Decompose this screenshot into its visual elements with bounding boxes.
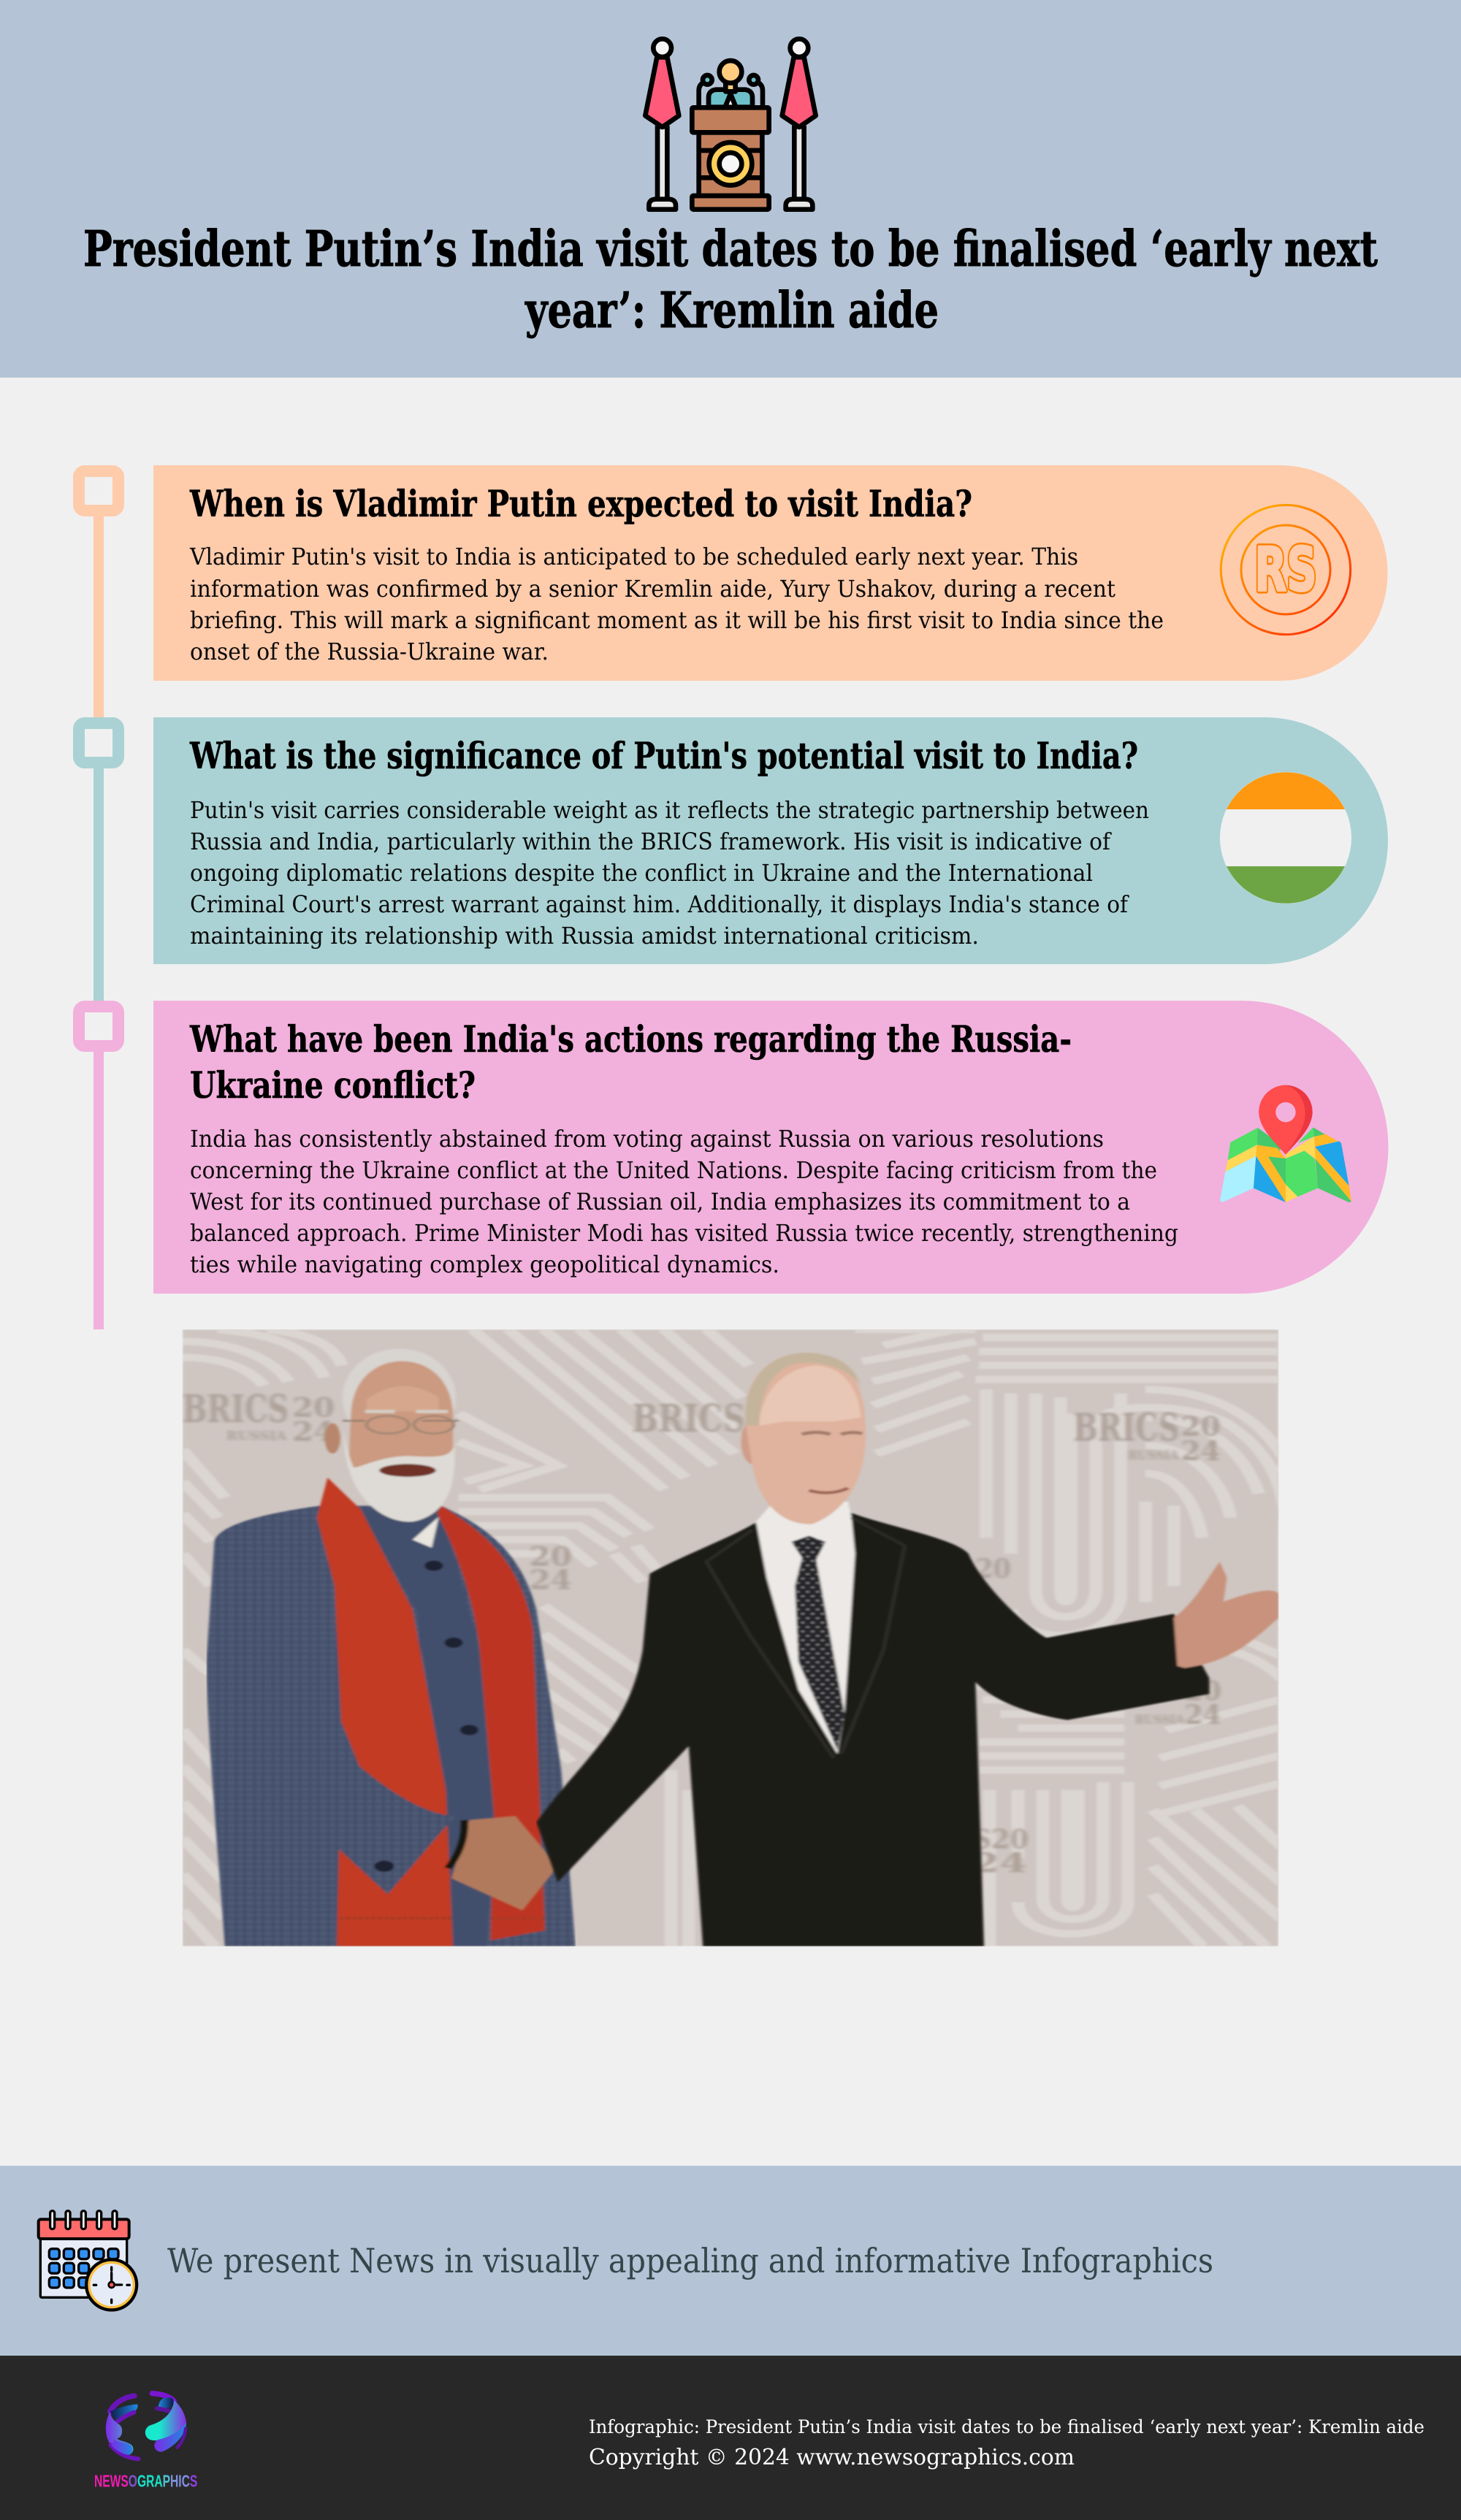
Putin figure [536,1353,1278,1947]
logo: Newsographics [94,2394,197,2490]
heading: What is the significance of Putin's potential visit to India? [189,734,1138,777]
logo wordmark: NEWSOGRAPHICS [94,2471,197,2490]
icon: map with pin [1220,1085,1351,1202]
copyright: Copyright © 2024 www.newsographics.com [589,2445,1075,2470]
body text: Russia and India, particularly within the BRICS framework. His visit is indicative of [190,828,1112,855]
photo backdrop lettering: 20 [1181,1411,1221,1442]
body text: maintaining its relationship with Russia amidst international criticism. [190,922,979,950]
title: year’: Kremlin aide [524,281,939,339]
Modi figure [207,1348,576,1947]
photo backdrop lettering: 24 [292,1416,335,1448]
photo: Modi and Putin handshake [183,1329,1286,1947]
icon: Indian flag circle [1220,772,1351,904]
body text: balanced approach. Prime Minister Modi has visited Russia twice recently, strengthening [190,1219,1178,1247]
tagline: We present News in visually appealing and informative Infographics [167,2241,1213,2280]
body text: ongoing diplomatic relations despite the conflict in Ukraine and the International [190,859,1093,887]
photo backdrop lettering: 20 [292,1392,335,1424]
body text: information was confirmed by a senior Kremlin aide, Yury Ushakov, during a recent [190,575,1115,603]
photo backdrop lettering: 20 [530,1541,572,1573]
body text: India has consistently abstained from voting against Russia on various resolutions [190,1125,1104,1153]
panel: tagline band [0,2166,1461,2356]
timeline marker and stem 2 [79,723,118,1007]
photo backdrop lettering: 20 [975,1554,1011,1584]
heading [189,1017,1072,1107]
title [83,220,1378,339]
body text: concerning the Ukraine conflict at the United Nations. Despite facing criticism from the [190,1156,1157,1184]
panel: India's actions [153,1001,1389,1294]
photo backdrop lettering: BRICS [1073,1405,1180,1450]
icon: rouble RS coin: RS [1254,535,1317,606]
body text: Putin's visit carries considerable weight as it reflects the strategic partnership between [190,796,1149,824]
photo backdrop lettering: 20 [1184,1676,1221,1706]
photo backdrop lettering: 24 [1184,1700,1221,1730]
heading: Ukraine conflict? [190,1064,476,1107]
panel: significance of the visit [153,717,1388,964]
body text [190,1125,1178,1278]
photo backdrop lettering: RUSSIA [226,1429,287,1443]
panel: when is Putin expected [153,465,1388,681]
photo backdrop lettering: BRICS [632,1395,745,1440]
photo backdrop lettering: RUSSIA [1128,1448,1179,1462]
body text [190,796,1149,950]
timeline marker and stem 1 [79,471,118,723]
body text [189,543,1164,665]
body text: West for its continued purchase of Russian oil, India emphasizes its commitment to a [190,1188,1130,1215]
photo backdrop lettering: 24 [972,1848,1027,1879]
body text: Vladimir Putin's visit to India is anticipated to be scheduled early next year. This [189,543,1078,570]
photo backdrop lettering: 24 [1181,1435,1221,1467]
icon: calendar and clock [39,2211,138,2312]
icon: podium with flags [645,39,816,210]
icon: rouble RS coin: RS [1254,535,1317,606]
photo backdrop lettering: S20 [972,1824,1029,1855]
timeline marker and stem 3 [79,1007,118,1329]
body text: onset of the Russia-Ukraine war. [190,638,549,665]
heading: When is Vladimir Putin expected to visit India? [189,482,972,525]
footer credit: Infographic: President Putin’s India visit dates to be finalised ‘early next year’: Kremlin aide [589,2416,1424,2437]
photo backdrop lettering: 24 [530,1565,572,1595]
body text: briefing. This will mark a significant moment as it will be his first visit to India since the [190,606,1164,634]
body text: ties while navigating complex geopolitical dynamics. [190,1251,779,1278]
body text: Criminal Court's arrest warrant against him. Additionally, it displays India's stance of [190,890,1129,918]
photo backdrop lettering [183,1386,1221,1879]
photo backdrop lettering: BRICS [183,1386,289,1432]
photo backdrop lettering: RUSSIA [1135,1713,1185,1727]
heading: What have been India's actions regarding the Russia- [189,1017,1072,1061]
icon: rouble RS coin [1221,505,1351,635]
panel: footer [0,2356,1461,2520]
hair crown drawn first, face over it [343,1348,456,1446]
panel: header [0,0,1461,378]
